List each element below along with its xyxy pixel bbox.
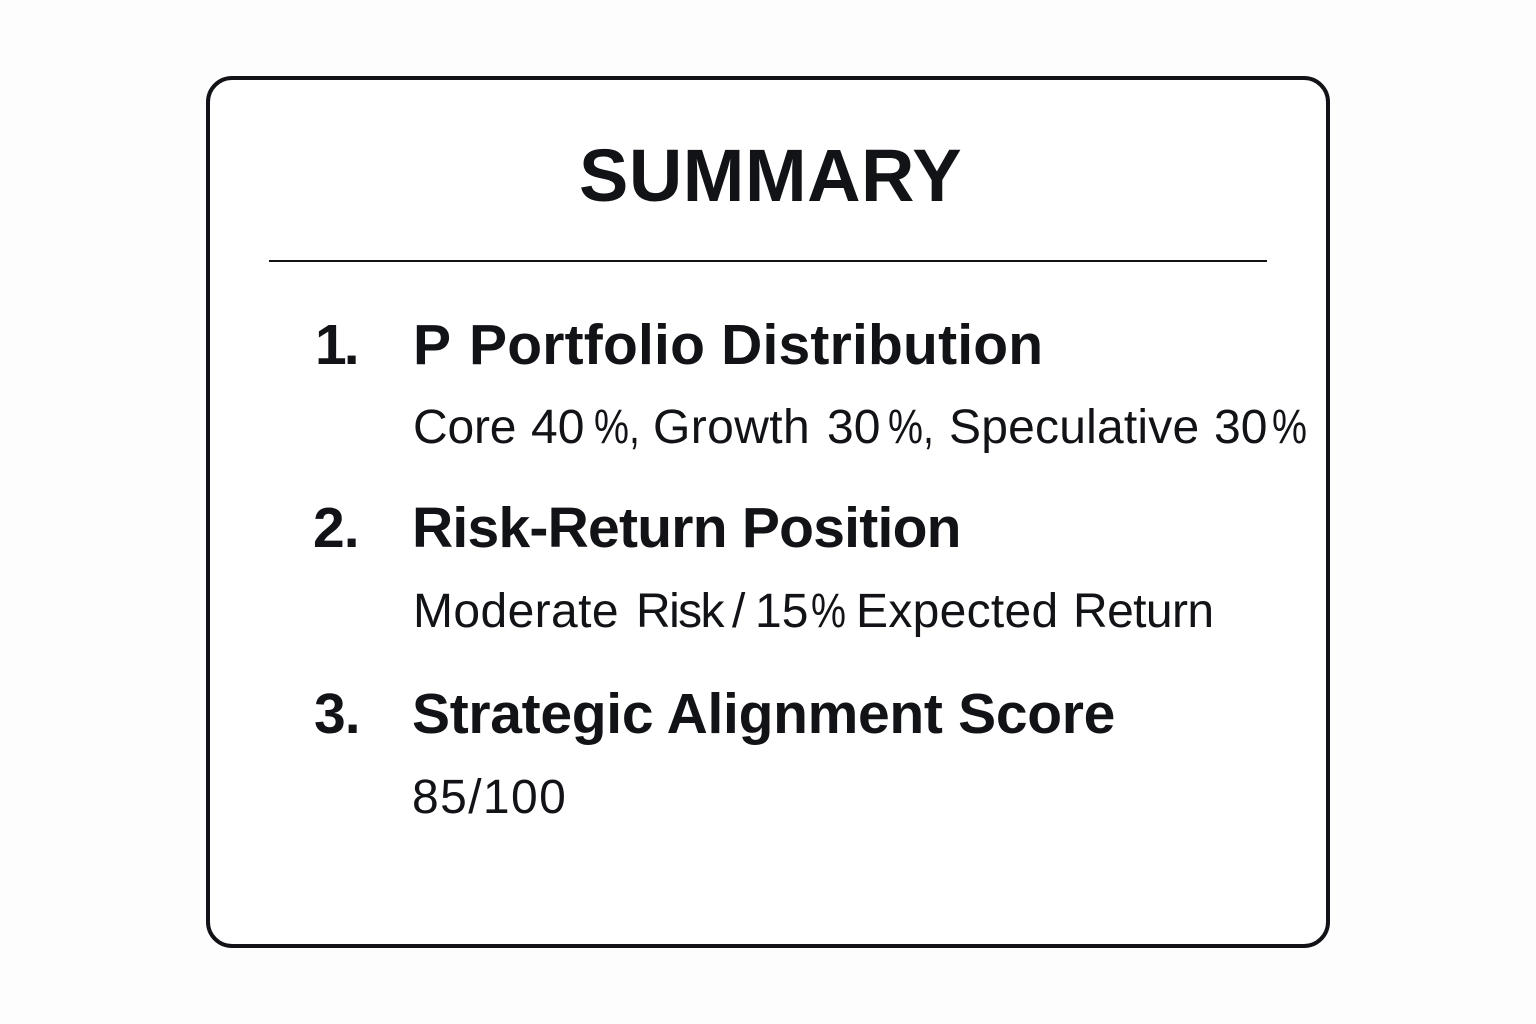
item 1 number: 1. [315, 313, 357, 377]
item 2 detail: Risk [636, 585, 723, 638]
divider line [269, 260, 1267, 262]
item 1 heading: Portfolio Distribution [469, 313, 1043, 377]
item 2 detail: Expected [856, 585, 1059, 638]
item 1 detail: % [1272, 401, 1307, 454]
item 1 detail: %, [888, 401, 934, 454]
item 1 detail: 30 [1214, 401, 1267, 454]
item 3 number: 3. [314, 682, 360, 746]
panel: summary card [206, 76, 1330, 948]
item 2 heading: Risk-Return Position [412, 496, 961, 560]
item 2 detail: 15 [755, 585, 808, 638]
item 1 detail: Growth [653, 401, 810, 454]
item 2 detail: Moderate [413, 585, 619, 638]
item 1 detail [413, 401, 1307, 454]
item 2 number: 2. [313, 496, 359, 560]
item 1 detail: Speculative [949, 401, 1199, 454]
item 3 detail: 85/100 [412, 771, 567, 824]
item 2 detail: % [811, 585, 846, 638]
item 3 heading: Strategic Alignment Score [412, 682, 1115, 746]
item 2 detail: Return [1073, 585, 1213, 638]
item 1 detail: 40 [531, 401, 584, 454]
item 1 detail: Core [413, 401, 516, 454]
item 1 detail: %, [594, 401, 640, 454]
item 2 detail: / [732, 585, 745, 638]
title: SUMMARY [579, 134, 962, 217]
item 1 heading: P [413, 313, 451, 377]
item 2 detail [413, 585, 1213, 638]
item 1 detail: 30 [827, 401, 880, 454]
